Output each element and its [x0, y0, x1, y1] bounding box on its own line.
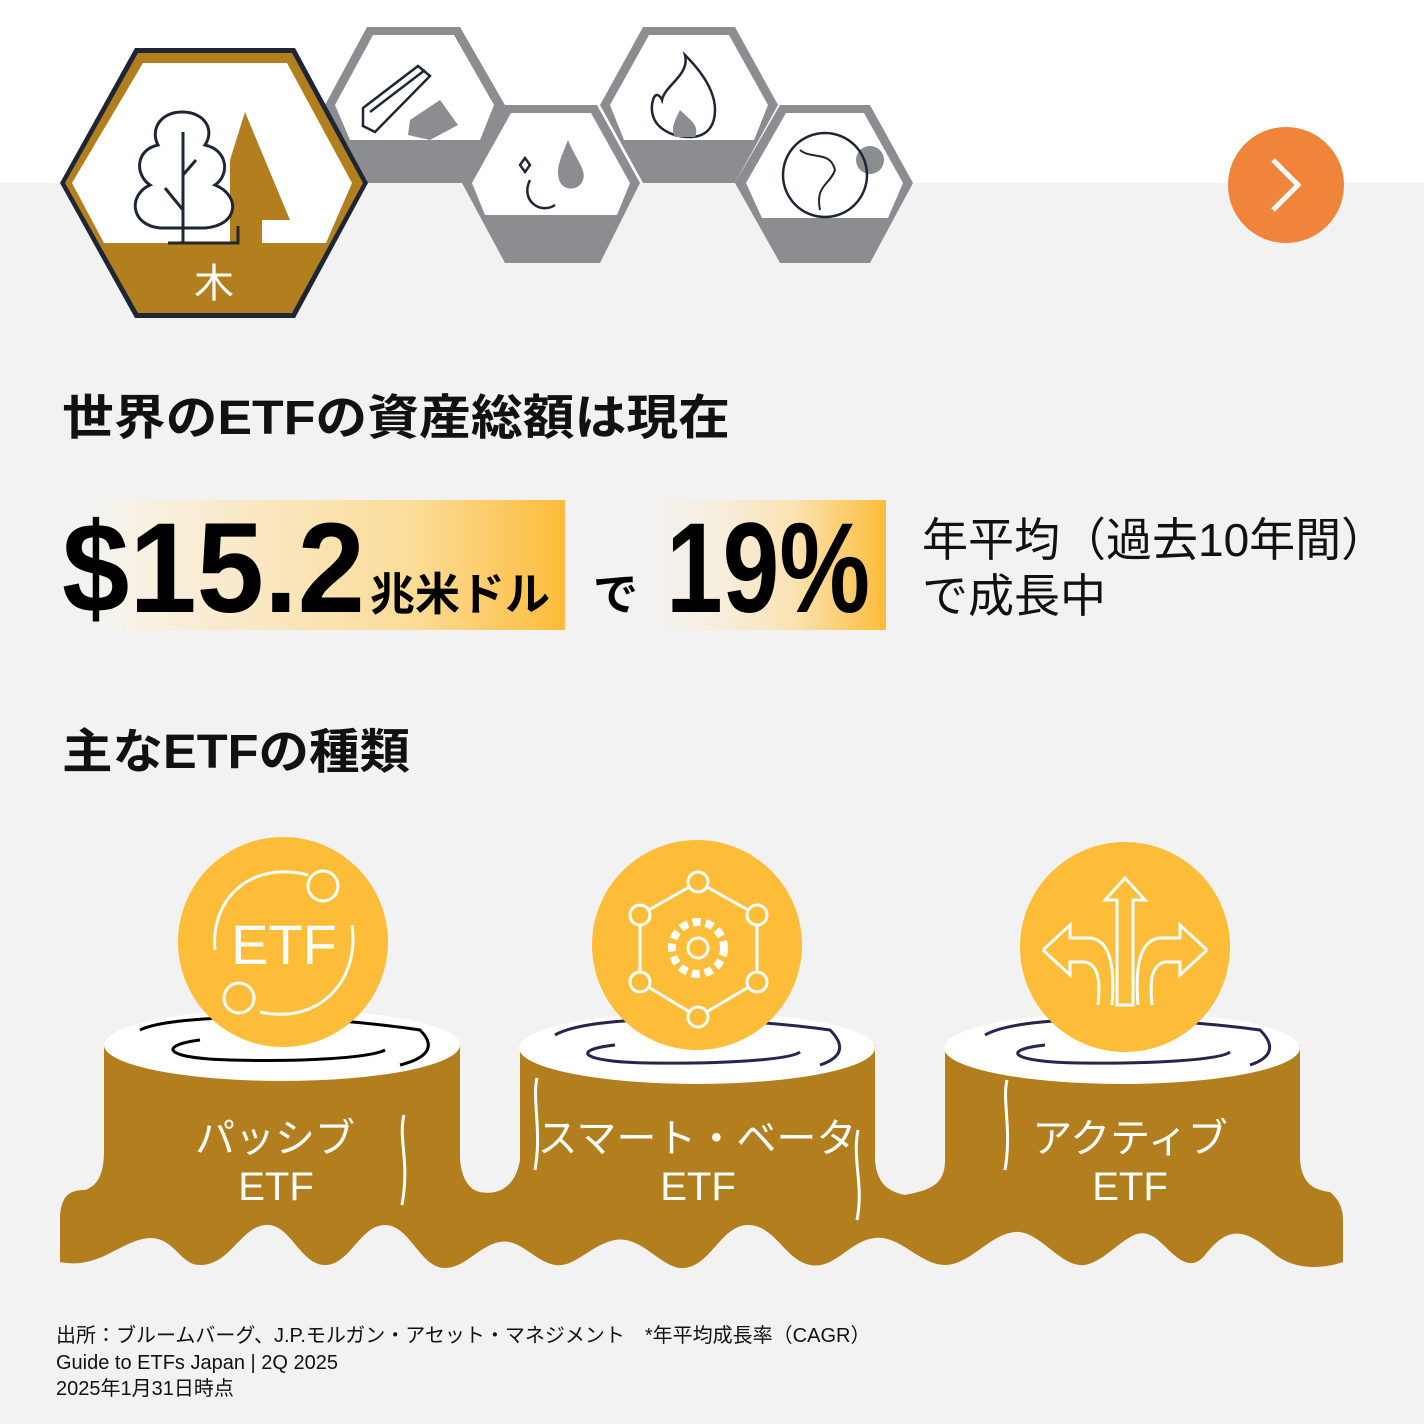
- hexagon: gray gold bar: [325, 27, 505, 183]
- label: smart beta ETF: スマート・ベータ: [538, 1117, 856, 1161]
- icon: passive ETF circle: [178, 837, 388, 1047]
- next button: [1228, 127, 1344, 243]
- label: smart beta ETF: ETF: [660, 1165, 736, 1209]
- text: growth description: 年平均（過去10年間）: [922, 514, 1387, 566]
- footer: sources: Guide to ETFs Japan | 2Q 2025: [56, 1352, 338, 1374]
- stat: 19%: 19%: [666, 497, 870, 640]
- label: passive ETF: ETF: [238, 1165, 314, 1209]
- text: growth description: [922, 514, 1387, 622]
- stumps base: [60, 1009, 1343, 1268]
- footer: sources: 2025年1月31日時点: [56, 1377, 234, 1400]
- heading: ETF types: 主なETFの種類: [62, 726, 410, 779]
- label: passive ETF: [195, 1117, 355, 1209]
- label: 木: 木: [194, 262, 234, 306]
- label: active ETF: ETF: [1092, 1165, 1168, 1209]
- text: growth description: で成長中: [922, 570, 1106, 622]
- hexagon: gray fire: [600, 27, 778, 183]
- icon: passive ETF circle: ETF: [231, 913, 337, 976]
- icon: smart beta circle: [592, 840, 802, 1050]
- icon: trees: [135, 112, 290, 243]
- label: active ETF: アクティブ: [1032, 1117, 1228, 1161]
- connector: で: で: [593, 569, 638, 620]
- heading: total assets: 世界のETFの資産総額は現在: [62, 392, 730, 445]
- hexagon: gray earth: [735, 105, 913, 263]
- label: passive ETF: パッシブ: [195, 1117, 355, 1161]
- label: active ETF: [1032, 1117, 1228, 1209]
- footer: sources: 出所：ブルームバーグ、J.P.モルガン・アセット・マネジメント *年平均成長率（CAGR）: [56, 1323, 870, 1347]
- stat: $15.2 trillion: $15.2: [62, 497, 365, 640]
- stat: $15.2 trillion: 兆米ドル: [370, 569, 550, 620]
- hexagon: gray water: [462, 105, 640, 263]
- hexagon: wood (active): [60, 48, 368, 318]
- footer: sources: [56, 1323, 870, 1400]
- label: smart beta ETF: [538, 1117, 856, 1209]
- stat: $15.2 trillion: [60, 497, 565, 640]
- icon: active ETF circle: [1020, 842, 1230, 1052]
